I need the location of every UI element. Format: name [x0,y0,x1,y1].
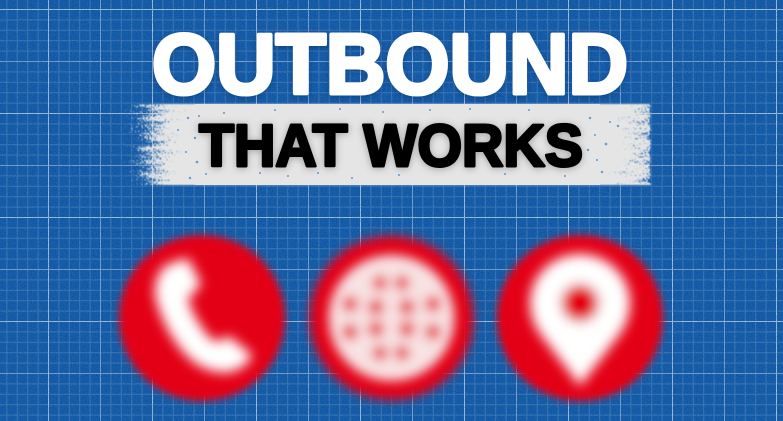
icon: phone in red circle [119,235,285,401]
icon: map pin in red circle [497,235,663,401]
title: OUTBOUND: OUTBOUND [152,18,628,112]
brush paint specks [177,108,619,179]
icon: globe in red circle [310,236,474,400]
brush stroke banner [122,104,652,185]
subtitle: THAT WORKS: THAT WORKS [199,113,583,179]
